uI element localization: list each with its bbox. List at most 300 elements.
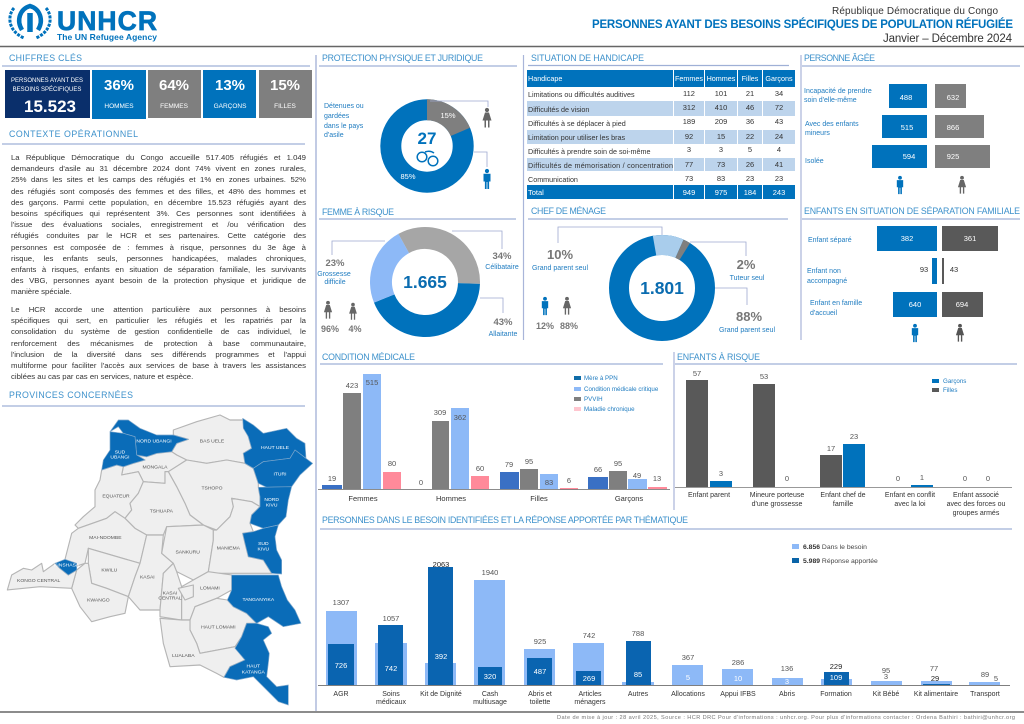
icon: woman	[482, 108, 492, 128]
map: provinces of DRC: TSHUAPA	[150, 508, 174, 514]
label: détenues	[324, 103, 364, 139]
bar chart: 136	[781, 664, 793, 673]
label: grossesse difficile: 23%	[325, 258, 345, 269]
text block: context paragraph 2: spécifiques qui sert, en particulier les réfugiés et les rapatriés par la	[11, 316, 306, 325]
table: 24	[775, 132, 783, 141]
bar chart: 95	[525, 457, 533, 466]
card: garçons: GARÇONS	[214, 103, 247, 110]
table: 23	[775, 174, 783, 183]
row: incapacité: Incapacité de prendre	[804, 88, 872, 95]
map: provinces of DRC: KATANGA	[242, 669, 266, 675]
bar chart: Soins	[382, 691, 400, 698]
heading: CHEF DE MÉNAGE	[531, 206, 606, 216]
row: incapacité	[804, 84, 966, 108]
panel: condition médicale	[318, 352, 670, 503]
label: allaitante	[489, 317, 518, 338]
text block: context paragraph 1: enfants à risques, enfants en situation de séparation familiale, les survivants	[11, 265, 306, 274]
panel: key figures	[2, 53, 312, 119]
text block: context paragraph 2: l'inclusion de la diversité dans ses différends programmes et l'appui	[11, 350, 306, 359]
map: provinces of DRC: HAUT UELE	[261, 445, 290, 451]
bar chart: 0	[896, 474, 900, 483]
card: femmes: FEMMES	[160, 103, 189, 110]
bar chart: 57	[693, 369, 701, 378]
label: 88%: 88%	[736, 309, 762, 324]
bar chart: 423	[346, 381, 358, 390]
bar chart: 60	[476, 464, 484, 473]
bar chart: 10	[734, 674, 742, 683]
card: filles	[259, 70, 312, 118]
map: provinces of DRC: KIVU	[258, 546, 270, 552]
table: 26	[746, 160, 754, 169]
bar chart: Femmes	[348, 494, 378, 503]
legend: Mère à PPN	[584, 375, 618, 382]
map: provinces of DRC: ITURI	[273, 472, 287, 478]
panel: personnes dans le besoin et réponse par thématique	[318, 515, 1012, 706]
bar chart: Enfant chef de	[820, 492, 866, 499]
icons and shares: 4%	[348, 324, 362, 334]
panel: femme à risque	[317, 207, 519, 342]
table: 5	[748, 145, 752, 154]
label: 2%: 2%	[737, 257, 756, 272]
card: hommes	[92, 70, 146, 119]
text block: context paragraph 1: risque, les enfants seuls, personnes handicapées, malades chroniques,	[11, 254, 306, 263]
bar chart: Enfant parent	[688, 492, 730, 499]
text block: context paragraph 1: manière spéciale.	[11, 287, 72, 296]
row: famille d'accueil: d'accueil	[810, 310, 837, 317]
bar chart: 742	[583, 631, 595, 640]
bar chart: Allocations	[671, 691, 705, 698]
table: Limitations ou difficultés auditives	[528, 90, 635, 99]
card: filles: FILLES	[274, 103, 296, 110]
row: famille d'accueil: Enfant en famille	[810, 300, 862, 307]
card: femmes	[148, 70, 201, 118]
map: provinces of DRC: UBANGI	[110, 455, 130, 461]
map: provinces of DRC: NORD UBANGI	[136, 439, 172, 445]
icon: laurel and sheltering hands	[10, 6, 50, 38]
heading: PERSONNE ÂGÉE	[804, 53, 875, 63]
row: incapacité: soin d'elle-même	[804, 97, 857, 104]
row: enfants mineurs: Avec des enfants	[805, 121, 859, 128]
bar chart: ménagers	[574, 699, 606, 706]
bar chart: 1	[920, 473, 924, 482]
bar chart: 5	[686, 673, 690, 682]
bar chart: 95	[882, 666, 890, 675]
wordmark: UNHCR	[57, 6, 157, 36]
bar chart: 367	[682, 653, 694, 662]
bar chart: Transport	[970, 691, 1000, 698]
table: Difficultés de vision	[528, 105, 589, 114]
bar chart: 320	[484, 672, 496, 681]
report title: République Démocratique du Congo	[832, 6, 998, 17]
text block: context paragraph 1: La République Démocratique du Congo accueille 517.405 réfugiés et 1.049	[11, 153, 306, 162]
bar chart: groupes armés	[953, 510, 1000, 517]
map: provinces of DRC: TSHOPO	[201, 485, 223, 491]
table	[527, 70, 795, 199]
slice values	[400, 111, 456, 181]
panel: protection physique et juridique	[319, 53, 517, 189]
row: isolée: 594	[903, 152, 915, 161]
heading: ENFANTS EN SITUATION DE SÉPARATION FAMILIALE	[804, 206, 1020, 216]
legend: Filles	[943, 387, 957, 394]
bar chart: Articles	[579, 691, 602, 698]
bar chart	[675, 369, 1012, 517]
table: 46	[746, 103, 754, 112]
map: provinces of DRC: EQUATEUR	[102, 494, 130, 500]
table: 23	[746, 174, 754, 183]
table: 15	[717, 132, 725, 141]
icons: man and woman	[897, 176, 966, 194]
bar chart: Enfant en conflit	[885, 492, 935, 499]
heading: CONDITION MÉDICALE	[322, 352, 415, 362]
text block: context paragraph 1: 25% dans les sites et les camps des réfugiés et 1% en zones urbaines. 52%	[11, 175, 306, 184]
card: garçons	[203, 70, 256, 118]
label: 2%: Tuteur seul	[730, 275, 765, 282]
map: provinces of DRC: KWILU	[101, 568, 118, 574]
bar chart: 286	[732, 658, 744, 667]
bar chart: Abris et	[528, 691, 552, 698]
heading: ENFANTS À RISQUE	[677, 352, 760, 362]
bar chart: 3	[884, 672, 888, 681]
bar chart: Kit Bébé	[873, 691, 899, 698]
map: provinces of DRC: KASAI	[140, 574, 155, 580]
table: Femmes	[675, 74, 703, 83]
bar chart: 0	[419, 478, 423, 487]
row: enfant séparé: 382	[901, 234, 913, 243]
bar chart: 3	[785, 677, 789, 686]
donut chart	[605, 231, 719, 345]
bar chart: Garçons	[615, 494, 643, 503]
bar chart: 269	[583, 674, 595, 683]
icon: man	[484, 169, 490, 189]
table: 3	[719, 145, 723, 154]
text block: context paragraph 1: des réfugiés sont composés des femmes et des filles, et 48% des hommes et	[11, 187, 306, 196]
row: non accompagné: 93	[920, 265, 928, 274]
row: enfant séparé	[808, 226, 998, 251]
text block: context paragraph 1: des garçons. Parmi cette population, en décembre 15.523 réfugiés ayant des	[11, 198, 306, 207]
bar chart: 362	[454, 413, 466, 422]
table: 101	[715, 89, 727, 98]
label: 88%	[719, 309, 775, 334]
row: isolée: 925	[947, 152, 959, 161]
bar chart: 0	[785, 474, 789, 483]
text block: context paragraph 2: ciblées au cas par cas en services, nature et espèce.	[11, 372, 193, 381]
table: Difficultés à se déplacer à pied	[528, 119, 626, 128]
bar chart: 109	[830, 673, 842, 682]
table: 949	[683, 188, 695, 197]
total card: 15.523	[24, 97, 76, 116]
row: isolée	[805, 145, 990, 168]
bar chart: 80	[388, 459, 396, 468]
icons and shares	[321, 301, 362, 334]
bar chart: d'une grossesse	[752, 501, 802, 508]
donut chart	[391, 110, 463, 182]
row: enfants mineurs: 866	[947, 123, 959, 132]
table: 77	[685, 160, 693, 169]
map: provinces of DRC: LOMAMI	[200, 586, 220, 592]
text block: context paragraph 1: l'issue des évaluations sociales, enregistrement et /ou vérification des	[11, 220, 306, 229]
legend: Condition médicale critique	[584, 386, 659, 393]
bar chart: 6	[567, 476, 571, 485]
heading: FEMME À RISQUE	[322, 207, 394, 217]
total card	[5, 70, 90, 118]
legend	[932, 378, 966, 394]
bar chart: 77	[930, 664, 938, 673]
table: 43	[775, 117, 783, 126]
donut chart	[365, 222, 485, 342]
bar chart: toilette	[530, 699, 550, 706]
label: détenues: dans le pays	[324, 123, 364, 130]
row: isolée: Isolée	[805, 158, 824, 165]
text block: context paragraph 2: Le HCR accorde une attention particulière aux personnes à besoins	[11, 305, 306, 314]
slice values: 15%	[440, 111, 456, 120]
map: provinces of DRC: KWANGO	[87, 598, 110, 604]
leader lines	[332, 231, 503, 313]
row: enfants mineurs: 515	[901, 123, 913, 132]
report title	[592, 6, 1013, 45]
bar chart: 89	[981, 670, 989, 679]
label: célibataire: 34%	[492, 251, 512, 262]
table: 34	[775, 89, 783, 98]
bar chart: Appui IFBS	[720, 691, 756, 698]
row: incapacité: 632	[947, 93, 959, 102]
map: provinces of DRC: KASAI	[163, 590, 177, 596]
table: 92	[685, 132, 693, 141]
label: 10%	[532, 247, 588, 272]
label: allaitante: Allaitante	[489, 331, 518, 338]
bar chart: 392	[435, 652, 447, 661]
panel: situation de handicap	[527, 53, 795, 199]
table: Handicape	[528, 74, 562, 83]
label: détenues: gardées	[324, 113, 350, 120]
row: famille d'accueil: 640	[909, 300, 921, 309]
bar chart: Cash	[482, 691, 498, 698]
table: 4	[777, 145, 781, 154]
card: filles: 15%	[270, 77, 300, 94]
total card: BESOINS SPÉCIFIQUES	[13, 86, 81, 93]
bar chart	[318, 560, 1010, 706]
bar chart: Formation	[820, 691, 852, 698]
heading: PERSONNES DANS LE BESOIN IDENTIFIÉES ET LA RÉPONSE APPORTÉE PAR THÉMATIQUE	[322, 515, 688, 525]
map: provinces of DRC: KINSHASA	[54, 563, 80, 569]
bar chart: 95	[614, 459, 622, 468]
row: enfants mineurs: mineurs	[805, 130, 830, 137]
leader lines	[430, 101, 488, 167]
text block: context paragraph 1: réfugiés conduites par le HCR et ses partenaires. Cette catégorie des	[11, 231, 306, 240]
bar chart: 0	[963, 474, 967, 483]
label: célibataire: Célibataire	[485, 264, 519, 271]
bar chart: 742	[385, 664, 397, 673]
bar chart: 2063	[433, 560, 449, 569]
bar chart: multiusage	[473, 699, 507, 706]
bar chart: 925	[534, 637, 546, 646]
bar chart: 1057	[383, 614, 399, 623]
bar chart: 17	[827, 444, 835, 453]
label: allaitante: 43%	[493, 317, 513, 328]
table: Filles	[742, 74, 759, 83]
bar chart: 66	[594, 465, 602, 474]
bar chart: famille	[833, 501, 853, 508]
map: provinces of DRC: SUD	[115, 449, 126, 455]
row: non accompagné	[807, 258, 958, 285]
table: 112	[683, 89, 695, 98]
text block: context paragraph 2	[11, 305, 306, 381]
label: 10%: 10%	[547, 247, 573, 262]
map: provinces of DRC: TANGANYIKA	[242, 597, 275, 603]
table: 73	[685, 174, 693, 183]
bar chart: 788	[632, 629, 644, 638]
slice values: 85%	[400, 172, 416, 181]
table: 189	[683, 117, 695, 126]
text block: context paragraph 2: consolidation du système de gestion confidentielle de cas individuel, le	[11, 327, 306, 336]
footer source note: Date de mise à jour : 28 avril 2025, Source : HCR DRC Pour d'informations : unhcr.org. Pour plus d'informations contacter : Ordena Bathiri : bathiri@unhcr.org	[557, 715, 1015, 721]
icons and shares: 88%	[560, 321, 578, 331]
label: 88%: Grand parent seul	[719, 327, 775, 334]
text block: context paragraph 1: demandeurs d'asile au 31 décembre 2024 dont 74% vivent en zones rurales,	[11, 164, 306, 173]
icon: handcuffs	[417, 151, 438, 166]
bar chart: 487	[534, 667, 546, 676]
donut total: 1.665	[403, 272, 447, 292]
icons and shares: 12%	[536, 321, 554, 331]
bar chart: 83	[545, 478, 553, 487]
table: 22	[746, 132, 754, 141]
table: 36	[746, 117, 754, 126]
heading: chiffres clés: CHIFFRES CLÉS	[9, 53, 82, 63]
map: provinces of DRC: LUALABA	[172, 653, 195, 659]
bar chart: avec des forces ou	[947, 501, 1005, 508]
row: enfants mineurs	[805, 115, 984, 138]
panel: enfants à risque	[675, 352, 1017, 517]
bar chart: 53	[760, 372, 768, 381]
map: provinces of DRC: BAS UELE	[200, 439, 225, 445]
map: provinces of DRC	[7, 415, 313, 705]
map: provinces of DRC: SANKURU	[175, 549, 200, 555]
bar chart: 1940	[482, 568, 498, 577]
table: Limitation pour utiliser les bras	[528, 133, 625, 142]
bar chart: 23	[850, 432, 858, 441]
bar chart: Autres	[628, 691, 649, 698]
map: provinces of DRC: CENTRAL	[158, 596, 182, 602]
bar chart: AGR	[333, 691, 349, 698]
legend	[574, 375, 659, 413]
row: enfant séparé: Enfant séparé	[808, 237, 852, 244]
table: Garçons	[765, 74, 793, 83]
map: provinces of DRC: HAUT	[247, 664, 260, 670]
bar chart: 13	[653, 474, 661, 483]
table: Total	[528, 188, 544, 197]
panel: chef de ménage	[528, 206, 788, 345]
bar chart: avec la loi	[894, 501, 926, 508]
card: hommes: HOMMES	[104, 103, 134, 110]
table: 73	[717, 160, 725, 169]
row: famille d'accueil: 694	[956, 300, 968, 309]
legend: Maladie chronique	[584, 406, 635, 413]
heading: provinces concernées: PROVINCES CONCERNÉES	[9, 390, 133, 400]
table: 72	[775, 103, 783, 112]
table: 41	[775, 160, 783, 169]
table: Hommes	[707, 74, 736, 83]
text block: context paragraph 1	[11, 153, 306, 296]
bar chart: Filles	[530, 494, 548, 503]
report title: PERSONNES AYANT DES BESOINS SPÉCIFIQUES DE POPULATION RÉFUGIÉE	[592, 18, 1013, 31]
label: grossesse difficile	[317, 258, 351, 286]
bar chart: 726	[335, 661, 347, 670]
UNHCR logo	[10, 6, 157, 42]
map: provinces of DRC: KONGO CENTRAL	[17, 578, 60, 584]
bar chart: 309	[434, 408, 446, 417]
heading: PROTECTION PHYSIQUE ET JURIDIQUE	[322, 53, 483, 63]
row: non accompagné: 43	[950, 265, 958, 274]
table: 312	[683, 103, 695, 112]
card: femmes: 64%	[159, 77, 189, 94]
row: famille d'accueil	[810, 292, 983, 317]
icons and shares	[536, 297, 578, 331]
report title: Janvier – Décembre 2024	[883, 33, 1013, 45]
legend: 5.989 Réponse apportée	[803, 558, 878, 565]
row: non accompagné: accompagné	[807, 278, 847, 285]
map: provinces of DRC: HAUT LOMAMI	[201, 625, 236, 631]
table: 209	[715, 117, 727, 126]
total card: PERSONNES AYANT DES	[11, 78, 83, 84]
label: 2%	[730, 257, 765, 282]
legend: PVVIH	[584, 396, 603, 403]
map: provinces of DRC: MANIEMA	[217, 546, 241, 552]
bar chart: Abris	[779, 691, 795, 698]
map: provinces of DRC: KIVU	[266, 502, 278, 508]
bar chart: 0	[986, 474, 990, 483]
table: Difficultés de mémorisation / concentration	[528, 161, 673, 170]
legend	[792, 544, 878, 565]
text block: context paragraph 1: personnes est composée de : femmes à risque, personnes du 3e âge à	[11, 242, 306, 252]
bar chart: Kit alimentaire	[914, 691, 958, 698]
icons and shares: 96%	[321, 324, 339, 334]
label: détenues: d'asile	[324, 132, 344, 139]
label: 10%: Grand parent seul	[532, 265, 588, 272]
table: 975	[715, 188, 727, 197]
bar chart: 85	[634, 670, 642, 679]
row: non accompagné: Enfant non	[807, 268, 841, 275]
leader lines	[558, 227, 747, 305]
table: 83	[717, 174, 725, 183]
bar chart: 1307	[333, 598, 349, 607]
text block: context paragraph 2: renforcement des mécanismes de protection à base communautaire,	[11, 339, 306, 348]
bar chart	[318, 374, 670, 503]
donut total: 27	[418, 129, 436, 148]
bar chart: 49	[633, 471, 641, 480]
label: détenues: Détenues ou	[324, 103, 364, 110]
legend: Garçons	[943, 378, 966, 385]
table: 21	[746, 89, 754, 98]
table: 410	[715, 103, 727, 112]
tagline: The UN Refugee Agency	[57, 32, 157, 42]
bar chart: 229	[830, 662, 842, 671]
bar chart: 3	[719, 469, 723, 478]
map: provinces of DRC: NORD	[264, 497, 279, 503]
bar chart: 515	[366, 378, 378, 387]
table: 184	[744, 188, 756, 197]
bar chart: Enfant associé	[953, 492, 999, 499]
heading: contexte opérationnel: CONTEXTE OPÉRATIONNEL	[9, 129, 138, 139]
bar chart: médicaux	[376, 699, 406, 706]
bar chart: 19	[328, 474, 336, 483]
bar chart: Hommes	[436, 494, 466, 503]
row: enfant séparé: 361	[964, 234, 976, 243]
text block: context paragraph 2: multiforme pour faciliter l'accès aux services de base à travers les assistances	[11, 361, 306, 370]
map: provinces of DRC: MAI-NDOMBE	[89, 535, 122, 541]
table: 243	[773, 188, 785, 197]
bar chart: Mineure porteuse	[750, 492, 804, 499]
map: provinces of DRC: MONGALA	[143, 465, 168, 471]
row: incapacité: 488	[900, 93, 912, 102]
